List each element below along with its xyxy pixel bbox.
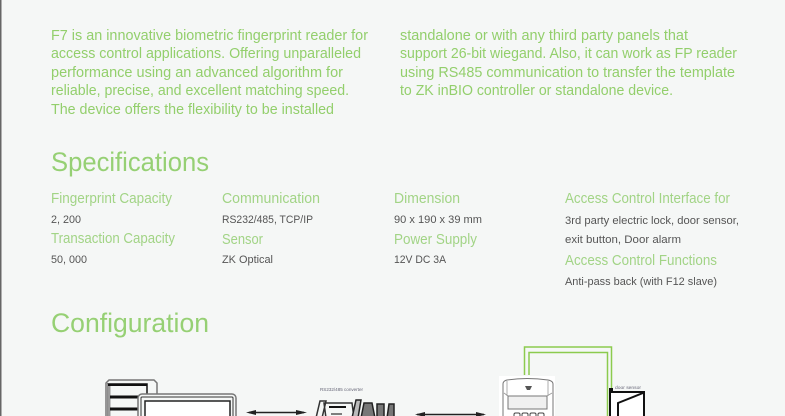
spec column 2: ZK Optical (222, 254, 273, 266)
spec column 2: RS232/485, TCP/IP (222, 214, 313, 226)
spec column 4: Access Control Interface for (565, 191, 730, 207)
intro text: left column: access control applications. Offering unparalleled (51, 46, 361, 62)
spec column 2: Communication (222, 191, 320, 207)
icon: server tower (106, 380, 157, 416)
intro text: right column: using RS485 communication to transfer the template (400, 65, 735, 81)
spec column 3: 90 x 190 x 39 mm (394, 214, 482, 226)
icon: RS232/485 converter (316, 387, 394, 416)
intro text: right column: standalone or with any third party panels that (400, 28, 688, 44)
spec column 1: Transaction Capacity (51, 231, 176, 247)
icon: door sensor (609, 385, 644, 416)
spec column 1: 2, 200 (51, 214, 81, 226)
spec column 4 (565, 191, 739, 288)
spec column 3: Power Supply (394, 232, 478, 248)
arrow: converter to reader (415, 412, 486, 416)
icon: computer monitor (138, 394, 236, 416)
intro text: left column: F7 is an innovative biometric fingerprint reader for (51, 28, 368, 44)
icon: door sensor: door sensor (615, 385, 642, 390)
spec column 3 (394, 191, 482, 266)
intro text: right column: support 26-bit wiegand. Also, it can work as FP reader (400, 46, 737, 62)
heading: Specifications: Specifications (51, 147, 209, 177)
connection wires: reader to door sensor (524, 347, 612, 416)
spec column 2 (222, 191, 320, 266)
heading: Configuration: Configuration (51, 308, 209, 338)
spec column 2: Sensor (222, 232, 263, 248)
icon: F7 fingerprint reader (499, 376, 555, 416)
intro text: right column: to ZK inBIO controller or standalone device. (400, 83, 673, 99)
intro text: right column (400, 28, 737, 99)
intro text: left column (51, 28, 368, 118)
spec column 1: 50, 000 (51, 254, 87, 266)
spec column 4: exit button, Door alarm (565, 234, 681, 246)
spec column 4: Access Control Functions (565, 253, 717, 269)
configuration diagram (106, 347, 644, 416)
spec column 1 (51, 191, 176, 266)
intro text: left column: reliable, precise, and excellent matching speed. (51, 83, 349, 99)
spec column 3: Dimension (394, 191, 460, 207)
intro text: left column: The device offers the flexibility to be installed (51, 102, 334, 118)
spec column 1: Fingerprint Capacity (51, 191, 173, 207)
arrow: computer to converter (246, 410, 307, 415)
icon: RS232/485 converter: RS232/485 converter (320, 387, 364, 392)
spec column 4: Anti-pass back (with F12 slave) (565, 276, 717, 288)
spec column 4: 3rd party electric lock, door sensor, (565, 215, 739, 227)
spec column 3: 12V DC 3A (394, 254, 447, 266)
intro text: left column: performance using an advanced algorithm for (51, 65, 343, 81)
